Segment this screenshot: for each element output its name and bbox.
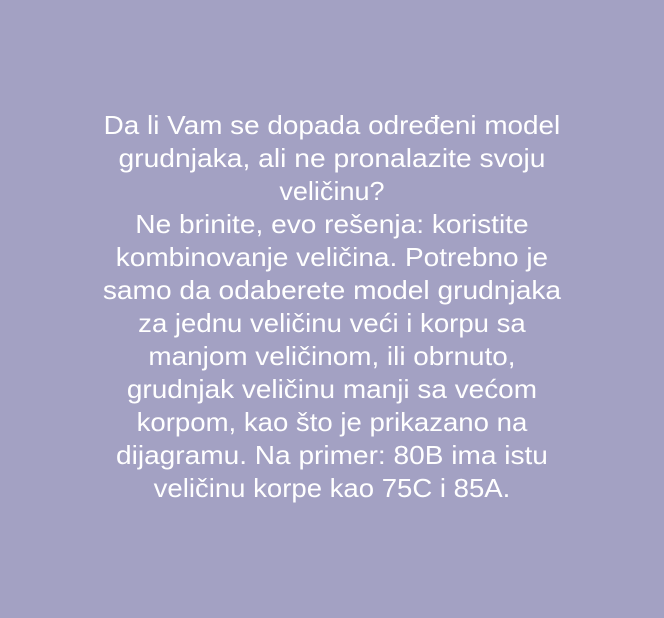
text block: bra size explanation: kombinovanje veličina. Potrebno je xyxy=(116,242,548,272)
text block: bra size explanation: Da li Vam se dopada određeni model xyxy=(104,110,560,140)
text block: bra size explanation xyxy=(103,110,561,503)
text block: bra size explanation: dijagramu. Na primer: 80B ima istu xyxy=(116,440,548,470)
text block: bra size explanation: samo da odaberete model grudnjaka xyxy=(103,275,561,305)
text block: bra size explanation: manjom veličinom, ili obrnuto, xyxy=(148,341,516,371)
text block: bra size explanation: za jednu veličinu veći i korpu sa xyxy=(138,308,526,338)
text block: bra size explanation: veličinu korpe kao 75C i 85A. xyxy=(154,473,510,503)
text block: bra size explanation: Ne brinite, evo rešenja: koristite xyxy=(135,209,529,239)
text block: bra size explanation: grudnjaka, ali ne pronalazite svoju xyxy=(118,143,545,173)
text block: bra size explanation: grudnjak veličinu manji sa većom xyxy=(127,374,537,404)
text block: bra size explanation: veličinu? xyxy=(279,176,385,206)
text block: bra size explanation: korpom, kao što je prikazano na xyxy=(137,407,527,437)
